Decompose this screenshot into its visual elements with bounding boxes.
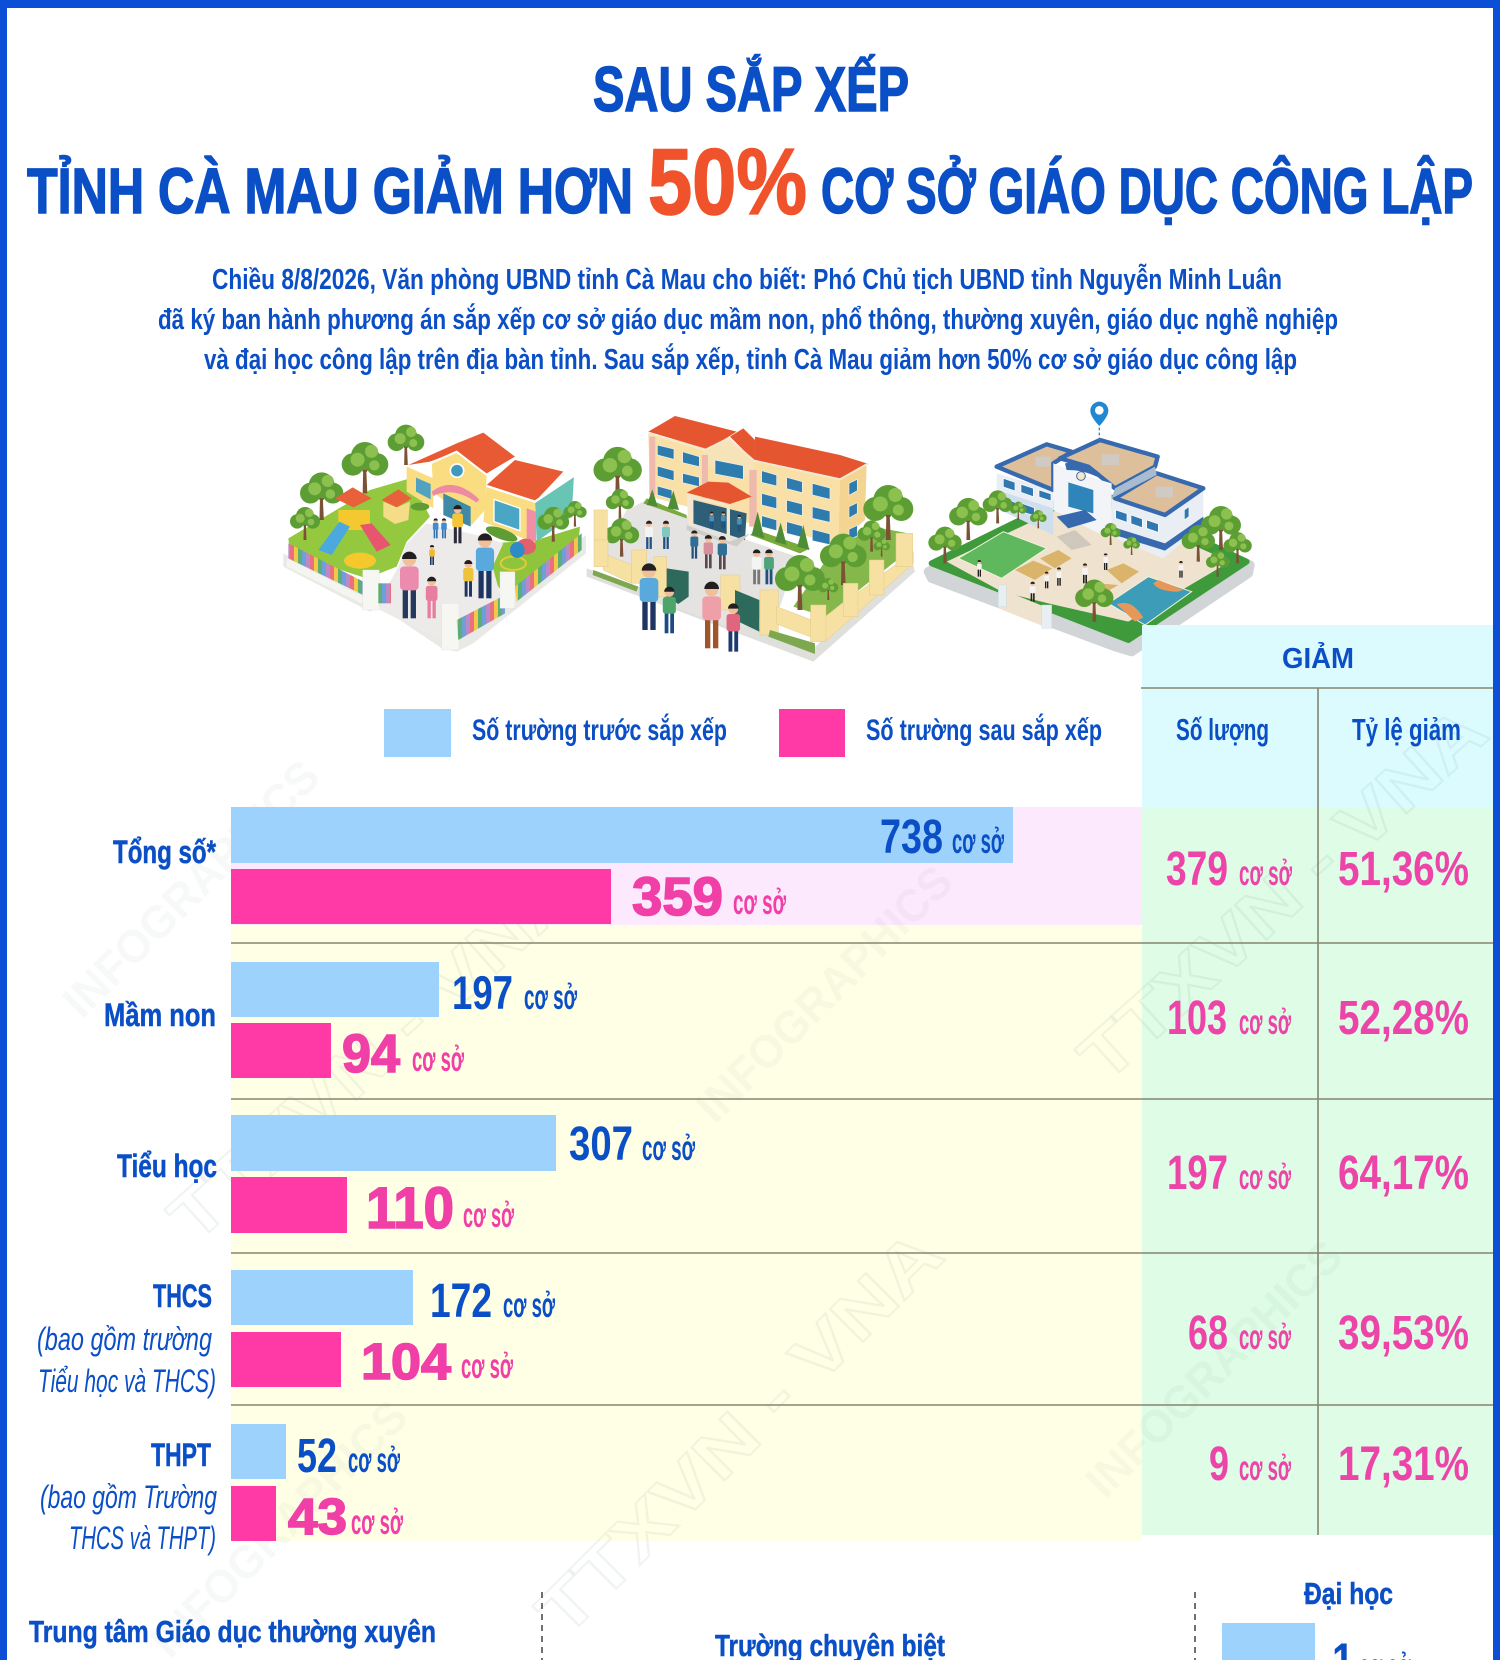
row: THPT: cơ sở	[351, 1503, 403, 1542]
row values: upper secondary: cơ sở	[1239, 1449, 1291, 1488]
row: Mầm non: Mầm non	[104, 997, 216, 1033]
legend swatch: before	[384, 709, 451, 757]
row: Tiểu học: cơ sở	[463, 1196, 514, 1235]
row: Tổng số	[113, 807, 1013, 927]
row values: total: 379	[1166, 843, 1228, 896]
row: THPT: cơ sở	[348, 1441, 400, 1480]
row: THPT: (bao gồm Trường	[40, 1479, 217, 1515]
row: Mầm non	[104, 962, 577, 1084]
row values: lower secondary: cơ sở	[1239, 1318, 1291, 1357]
watermarks: TTXVN - VNA	[522, 1215, 957, 1651]
row: THCS: 172	[430, 1275, 492, 1328]
row: Tiểu học: 307	[569, 1118, 633, 1171]
row: THCS: Tiểu học và THCS)	[38, 1363, 216, 1399]
table: reduction values	[1166, 641, 1469, 1491]
row: THPT	[40, 1424, 403, 1556]
illustration: kindergarten	[283, 425, 587, 652]
legend label: before: Số trường trước sắp xếp	[472, 713, 727, 747]
heading: continuing education centres: Trung tâm Giáo dục thường xuyên	[29, 1614, 436, 1649]
row: THPT: THCS và THPT)	[69, 1520, 216, 1556]
column heading: quantity: Số lượng	[1176, 712, 1269, 747]
title	[27, 54, 1473, 234]
row: THPT: 52	[297, 1430, 337, 1483]
legend label: after: Số trường sau sắp xếp	[866, 713, 1102, 747]
row: Tổng số: 359	[632, 867, 723, 927]
watermarks	[52, 692, 1500, 1660]
bottom section	[29, 1576, 1411, 1660]
row values: preschool	[1167, 992, 1469, 1045]
row: THCS: 104	[361, 1333, 452, 1390]
watermarks: INFOGRAPHICS	[685, 855, 962, 1132]
column heading: rate: Tỷ lệ giảm	[1352, 712, 1461, 747]
title highlight 50%: 50%	[648, 129, 807, 234]
bar: university before	[1222, 1623, 1315, 1660]
row: Tiểu học: Tiểu học	[117, 1148, 217, 1184]
legend	[384, 709, 1102, 757]
legend swatch: after	[779, 709, 845, 757]
row: Mầm non: 94	[342, 1024, 400, 1084]
illustration: secondary school	[587, 416, 915, 662]
panel: reduction table background	[1142, 625, 1493, 1535]
row values: lower secondary: 68	[1188, 1307, 1228, 1360]
table heading: GIẢM	[1282, 641, 1354, 675]
row: THPT: 43	[288, 1488, 347, 1545]
row: Tổng số: Tổng số*	[113, 834, 216, 870]
row values: upper secondary	[1209, 1438, 1469, 1491]
row: THCS: THCS	[153, 1278, 212, 1314]
watermarks: INFOGRAPHICS	[52, 750, 329, 1027]
row values: lower secondary	[1188, 1307, 1469, 1360]
title line 2 left: TỈNH CÀ MAU GIẢM HƠN	[27, 154, 633, 227]
panel: chart background rows	[231, 807, 1142, 1541]
row values: total: 51,36%	[1338, 843, 1469, 896]
row: Tiểu học: 110	[366, 1176, 454, 1241]
row values: primary: 197	[1167, 1147, 1228, 1200]
row: THCS: (bao gồm trường	[37, 1321, 212, 1357]
row: Mầm non: cơ sở	[412, 1040, 464, 1079]
row values: preschool: cơ sở	[1239, 1003, 1291, 1042]
row: Tiểu học: cơ sở	[642, 1129, 695, 1168]
heading: university: Đại học	[1304, 1576, 1393, 1611]
row: Tiểu học	[117, 1115, 695, 1241]
row values: upper secondary: 9	[1209, 1438, 1229, 1491]
row values: primary: cơ sở	[1239, 1158, 1291, 1197]
intro paragraph	[158, 262, 1338, 376]
row: THPT: THPT	[151, 1437, 211, 1473]
bar chart	[37, 807, 1013, 1556]
row values: preschool: 103	[1167, 992, 1227, 1045]
row values: lower secondary: 39,53%	[1338, 1307, 1469, 1360]
row values: total: cơ sở	[1239, 854, 1292, 893]
title line 1: SAU SẮP XẾP	[593, 54, 909, 125]
watermarks: INFOGRAPHICS	[1075, 1230, 1352, 1507]
illustration: high school with location pin	[928, 402, 1252, 652]
watermarks: INFOGRAPHICS	[140, 1390, 417, 1660]
row: THCS	[37, 1270, 555, 1399]
watermarks: TTXVN - VNA	[1064, 692, 1500, 1096]
row values: primary	[1167, 1147, 1469, 1200]
row: THCS: cơ sở	[503, 1286, 555, 1325]
row: Tổng số: 738	[880, 811, 943, 864]
row: Mầm non: 197	[452, 966, 513, 1019]
row: Tổng số: cơ sở	[952, 822, 1004, 861]
watermarks: TTXVN - VNA	[154, 852, 591, 1256]
row values: preschool: 52,28%	[1338, 992, 1469, 1045]
row: Tổng số: cơ sở	[733, 883, 786, 922]
row: THCS: cơ sở	[461, 1347, 513, 1386]
row values: primary: 64,17%	[1338, 1147, 1469, 1200]
row values: total	[1166, 843, 1469, 896]
row values: upper secondary: 17,31%	[1338, 1438, 1469, 1491]
row: Mầm non: cơ sở	[524, 978, 577, 1017]
